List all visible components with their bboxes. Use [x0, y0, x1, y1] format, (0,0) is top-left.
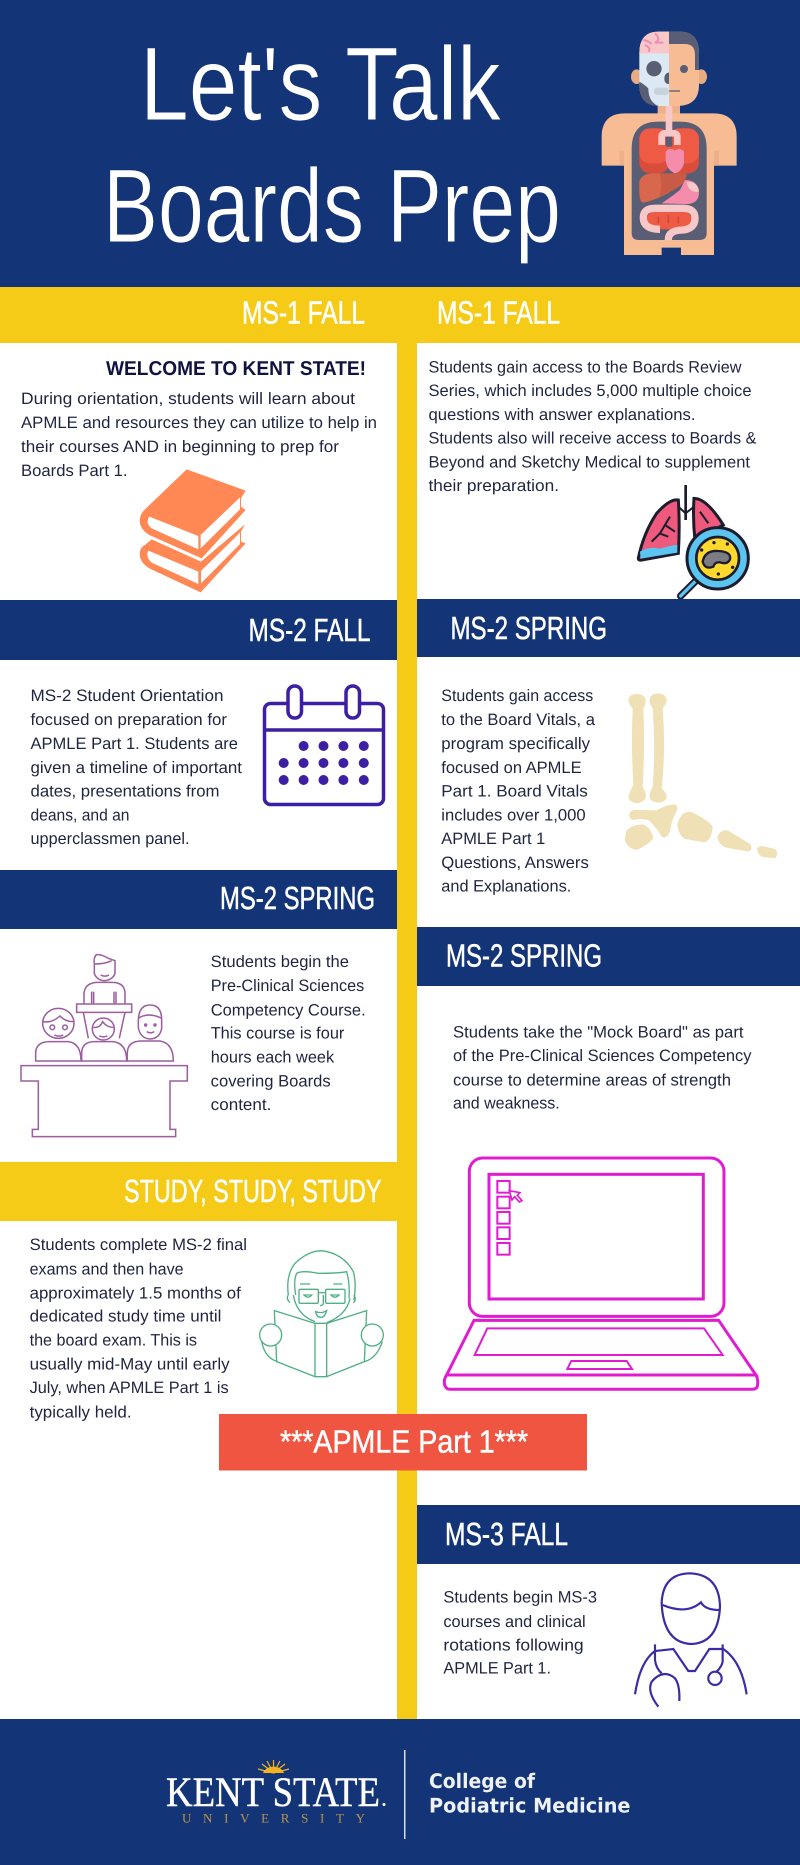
text: mock board	[453, 1024, 752, 1112]
heading bar: MS-2 Spring right: MS-2 SPRING	[450, 610, 607, 646]
heading bar: MS-2 Spring second right	[417, 927, 800, 986]
text: dedicated study: usually mid-May until early	[30, 1355, 230, 1373]
heading band: MS-1 Fall: MS-1 FALL	[437, 294, 560, 330]
panel: board vitals	[417, 657, 800, 927]
heading bar: MS-3 Fall: MS-3 FALL	[445, 1516, 568, 1552]
text: dedicated study: Students complete MS-2 final	[30, 1236, 247, 1254]
footer	[0, 1719, 800, 1865]
heading bar: MS-2 Spring left	[0, 870, 397, 929]
icon: human anatomy figure	[602, 32, 737, 255]
heading bar: Study, Study, Study: STUDY, STUDY, STUDY	[124, 1173, 382, 1209]
text: dedicated study: typically held.	[30, 1403, 132, 1421]
text: student orientation: focused on preparation for	[30, 711, 228, 729]
icon: foot bones	[625, 693, 777, 858]
text: orientation	[21, 390, 377, 480]
text: clinical rotations: courses and clinical	[443, 1613, 586, 1631]
text: college name: Podiatric Medicine	[429, 1794, 630, 1818]
text: student orientation: deans, and an	[30, 806, 130, 824]
icon: lungs and magnifier	[638, 485, 748, 596]
text: board vitals: program specifically	[441, 735, 591, 753]
text: dedicated study	[30, 1236, 247, 1421]
heading bar: MS-2 Spring right	[417, 599, 800, 657]
text: board vitals: to the Board Vitals, a	[441, 711, 596, 729]
text: boards review: Students gain access to the Boards Review	[428, 358, 742, 376]
title: Let's Talk	[140, 26, 501, 143]
text: boards review: Beyond and Sketchy Medical to supplement	[428, 454, 750, 472]
heading band: MS-1 Fall	[0, 287, 800, 343]
text: mock board: of the Pre-Clinical Sciences Competency	[453, 1047, 752, 1065]
icon: student reading	[260, 1251, 383, 1377]
icon: laptop	[444, 1158, 758, 1389]
text: competency course: Pre-Clinical Sciences	[211, 977, 364, 995]
text: boards review: their preparation.	[428, 477, 559, 495]
text: boards review: Students also will receive access to Boards &	[428, 430, 756, 448]
logo: Kent State University	[166, 1760, 386, 1826]
panel: boards review series	[417, 343, 800, 599]
text: student orientation: MS-2 Student Orientation	[30, 687, 224, 705]
text: student orientation: APMLE Part 1. Students are	[30, 735, 238, 753]
text: orientation: APMLE and resources they can utilize to help in	[21, 414, 377, 432]
heading bar: MS-2 Fall: MS-2 FALL	[248, 612, 370, 648]
panel: mock board	[417, 986, 800, 1505]
text: orientation: During orientation, students will learn about	[21, 390, 355, 408]
text: board vitals: and Explanations.	[441, 878, 571, 896]
text: competency course: content.	[211, 1096, 271, 1114]
text: orientation: Boards Part 1.	[21, 462, 128, 480]
header banner	[0, 0, 800, 287]
text: competency course	[211, 953, 366, 1114]
icon: lecture panel	[21, 955, 187, 1137]
callout: APMLE Part 1: ***APMLE Part 1***	[280, 1424, 528, 1460]
text: board vitals: focused on APMLE	[441, 759, 582, 777]
panel: MS-3 courses	[417, 1564, 800, 1719]
text: dedicated study: approximately 1.5 months of	[30, 1284, 241, 1302]
heading bar: MS-3 Fall	[417, 1505, 800, 1564]
text: competency course: hours each week	[211, 1048, 335, 1066]
text: competency course: Students begin the	[211, 953, 349, 971]
text: college name	[429, 1769, 630, 1818]
text: mock board: Students take the "Mock Board" as part	[453, 1024, 744, 1042]
text: clinical rotations: rotations following	[443, 1636, 584, 1654]
heading bar: MS-2 Fall	[0, 600, 397, 660]
text: mock board: course to determine areas of strength	[453, 1072, 731, 1090]
text: board vitals: APMLE Part 1	[441, 830, 545, 848]
text: dedicated study: exams and then have	[30, 1260, 184, 1278]
logo: Kent State University: UNIVERSITY	[182, 1810, 366, 1826]
heading bar: MS-2 Spring second right: MS-2 SPRING	[446, 938, 602, 974]
text: board vitals: Questions, Answers	[441, 854, 589, 872]
text: dedicated study: July, when APMLE Part 1 is	[30, 1379, 229, 1397]
text: college name: College of	[429, 1769, 535, 1793]
text: orientation: their courses AND in beginning to prep for	[21, 438, 340, 456]
text: clinical rotations: APMLE Part 1.	[443, 1659, 551, 1677]
text: board vitals: Students gain access	[441, 687, 593, 705]
text: student orientation	[30, 687, 242, 848]
text: dedicated study: dedicated study time until	[30, 1308, 221, 1326]
icon: sun	[258, 1760, 289, 1773]
text: student orientation: given a timeline of important	[30, 759, 242, 777]
text: competency course: This course is four	[211, 1024, 345, 1042]
icon: calendar	[264, 686, 384, 804]
text: competency course: covering Boards	[211, 1072, 331, 1090]
text: student orientation: upperclassmen panel.	[30, 830, 190, 848]
text: boards review	[428, 358, 756, 495]
text: board vitals	[441, 687, 596, 896]
text: dedicated study: the board exam. This is	[30, 1332, 197, 1350]
panel: dedicated study	[0, 1221, 397, 1719]
text: clinical rotations	[443, 1588, 597, 1677]
logo: Kent State University: KENT STATE	[166, 1770, 380, 1816]
callout: APMLE Part 1	[219, 1414, 587, 1470]
panel: welcome to Kent State	[0, 343, 397, 600]
text: competency course: Competency Course.	[211, 1002, 366, 1020]
heading: welcome: WELCOME TO KENT STATE!	[106, 358, 366, 380]
panel: pre-clinical sciences course	[0, 929, 397, 1162]
text: boards review: questions with answer explanations.	[428, 406, 696, 424]
heading bar: MS-2 Spring left: MS-2 SPRING	[220, 880, 375, 916]
text: clinical rotations: Students begin MS-3	[443, 1588, 597, 1606]
heading band: MS-1 Fall: MS-1 FALL	[242, 294, 365, 330]
text: boards review: Series, which includes 5,000 multiple choice	[428, 382, 752, 400]
icon: stacked books	[140, 469, 246, 592]
text: mock board: and weakness.	[453, 1094, 560, 1112]
panel: MS-2 student orientation	[0, 660, 397, 870]
text: student orientation: dates, presentations from	[30, 782, 220, 800]
text: board vitals: Part 1. Board Vitals	[441, 782, 588, 800]
heading bar: Study, Study, Study	[0, 1162, 397, 1221]
title	[103, 26, 561, 265]
text: board vitals: includes over 1,000	[441, 806, 586, 824]
title: Boards Prep	[103, 148, 561, 265]
icon: doctor with stethoscope	[635, 1573, 747, 1707]
